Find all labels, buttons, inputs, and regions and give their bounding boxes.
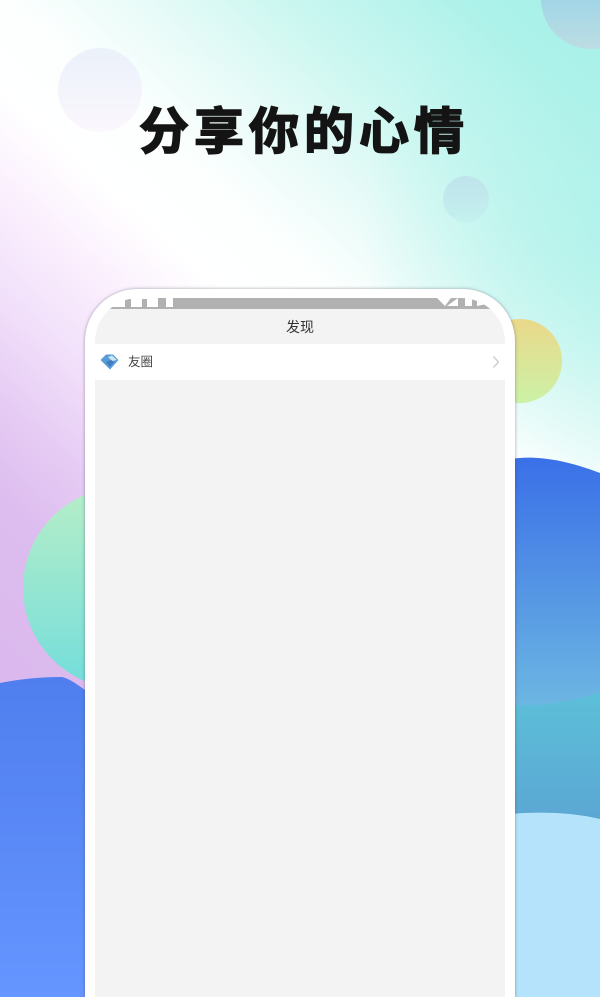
wave: right teal <box>500 692 600 997</box>
nav heading: 发现 <box>286 319 314 335</box>
title: 分享你的心情 <box>139 104 469 160</box>
circle: green left <box>23 487 225 689</box>
icon: chevron <box>493 356 500 368</box>
circle: top right <box>541 0 600 49</box>
icon: blue handshake diamond <box>100 354 118 370</box>
list row <box>95 344 505 380</box>
wave: right blue <box>500 458 600 997</box>
panel: phone mockup <box>85 289 515 997</box>
circle: small right of title <box>443 176 489 222</box>
wave: right light blue <box>500 813 600 997</box>
circle: top left <box>58 48 142 132</box>
status bar <box>110 298 490 309</box>
circle: yellow behind phone <box>478 319 562 403</box>
phone screen <box>95 298 505 997</box>
row label: 友圈 <box>128 355 153 369</box>
wave: left blue <box>0 677 100 997</box>
